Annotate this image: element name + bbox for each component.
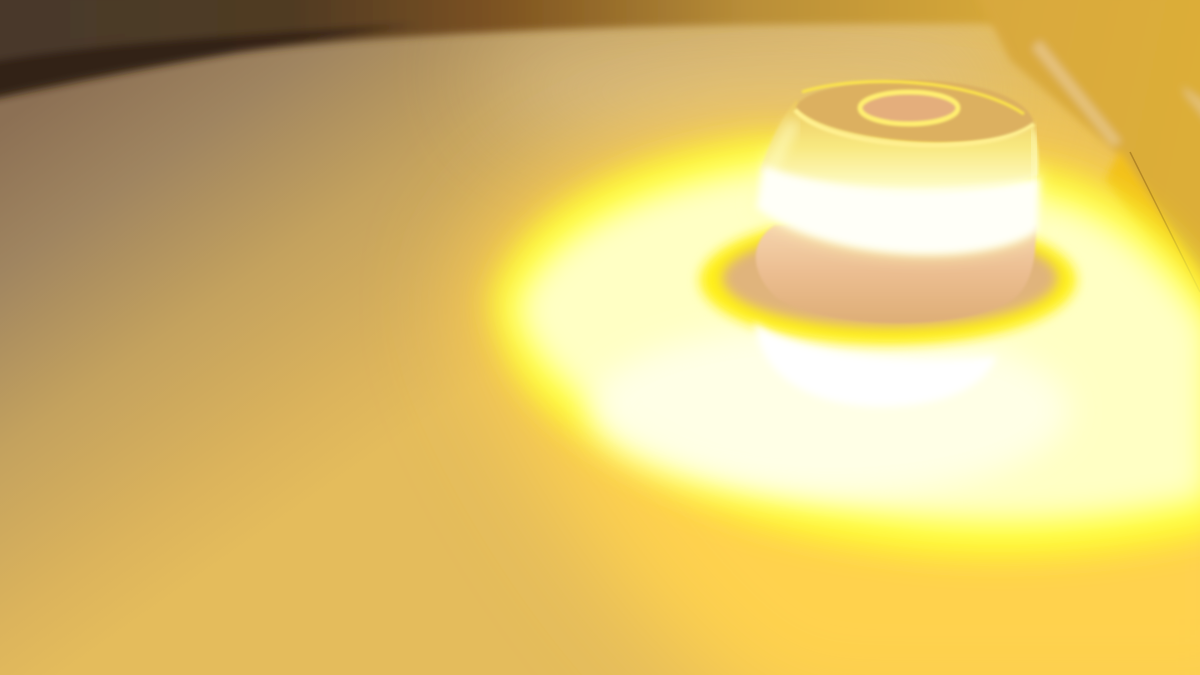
pale far surface (480, 30, 1010, 160)
reflection under beacon (754, 322, 997, 407)
yellow halo on surface (505, 150, 1200, 543)
cap inner ring (860, 92, 958, 124)
glass right highlight (1032, 130, 1036, 195)
shadow ring around beacon base (700, 215, 1076, 345)
warm glow spreading from the light (505, 150, 1200, 675)
glass left highlight (762, 122, 794, 195)
thin edge line (1130, 152, 1200, 292)
cap front rim highlight (795, 110, 1034, 145)
dark back wall (0, 0, 1000, 100)
light band halo (754, 150, 1040, 253)
beacon (754, 80, 1040, 323)
glass dome (760, 100, 1039, 193)
right raised edge (975, 0, 1200, 330)
lower housing (756, 225, 1036, 323)
glowing light band (756, 166, 1039, 254)
pale light pool (516, 165, 1200, 523)
cap rear rim highlight (802, 82, 1024, 114)
top cap (796, 80, 1034, 142)
